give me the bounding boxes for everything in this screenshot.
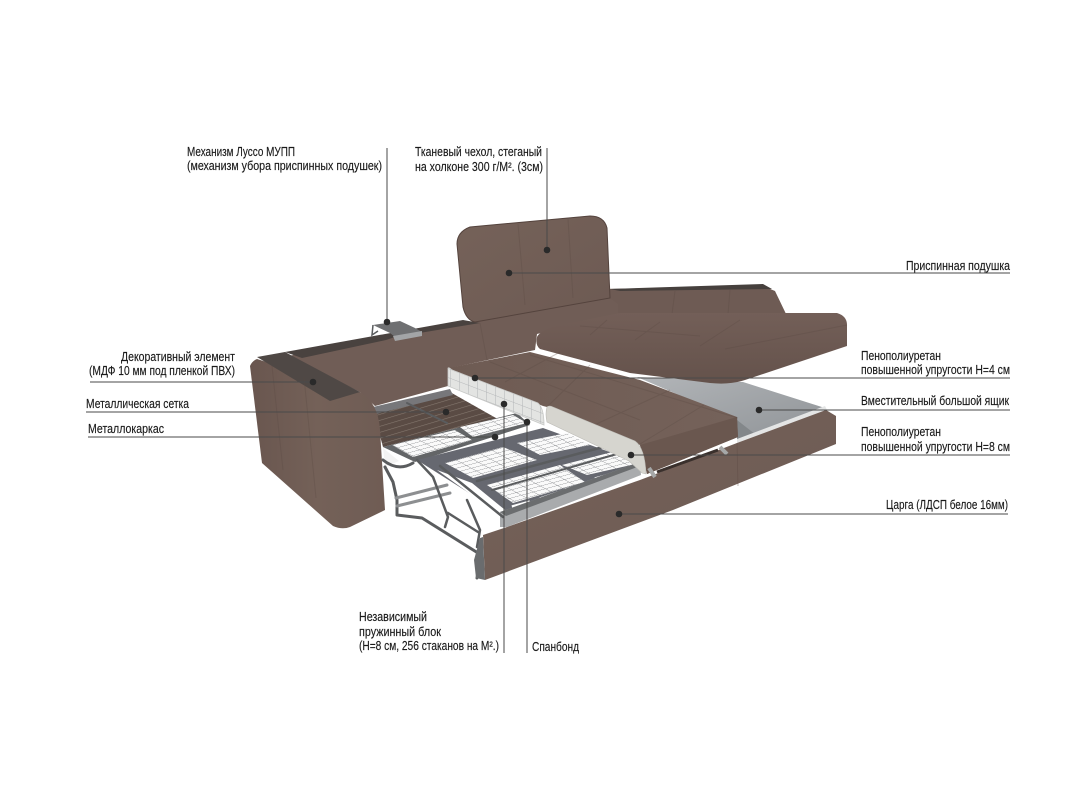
callout: spring block: (Н=8 см, 256 стаканов на М².) — [359, 638, 499, 653]
callout: foam 4 cm: повышенной упругости Н=4 см — [861, 362, 1010, 377]
callout: fabric cover: Тканевый чехол, стеганый — [415, 144, 542, 159]
legs under seat — [649, 447, 727, 477]
callout: foam 4 cm: Пенополиуретан — [861, 348, 941, 363]
callout: metal mesh: Металлическая сетка — [86, 396, 190, 411]
spring block strip, section 1 — [448, 368, 544, 425]
callout: spunbond — [524, 419, 579, 654]
callout: pillow: Приспинная подушка — [906, 258, 1011, 273]
storage box interior — [637, 377, 827, 444]
metal mesh and frame — [383, 413, 641, 527]
callout: foam 8 cm: Пенополиуретан — [861, 424, 941, 439]
callout: foam 8 cm: повышенной упругости Н=8 см — [861, 439, 1010, 454]
callout: mechanism: (механизм убора приспинных подушек) — [187, 158, 382, 173]
slat base behind the mattress — [373, 389, 503, 447]
left arm — [250, 352, 385, 528]
seat mattress, two sections — [448, 352, 738, 477]
raised chaise seat cushion — [536, 313, 847, 384]
rear mesh panels — [392, 430, 472, 457]
callout: decorative element: Декоративный элемент — [121, 349, 235, 364]
callout: metal frame — [88, 421, 498, 440]
callout: tsarga: Царга (ЛДСП белое 16мм) — [886, 497, 1008, 512]
folding mechanism legs — [383, 460, 503, 578]
callout: decorative element — [89, 349, 316, 385]
callout: storage box — [756, 393, 1010, 413]
white slots at the front — [512, 468, 635, 507]
callout: metal frame: Металлокаркас — [88, 421, 164, 436]
arm top: decorative dark panel — [257, 352, 360, 401]
back panel of the sofa — [285, 298, 618, 406]
base front (tsarga) — [483, 410, 836, 580]
callout: pillow — [506, 258, 1011, 276]
front frame base — [417, 428, 640, 517]
side rail — [500, 462, 641, 527]
callout: foam 4 cm — [472, 348, 1010, 381]
callout: spunbond: Спанбонд — [532, 639, 579, 654]
rear frame base — [383, 413, 530, 462]
callout: spring block — [359, 401, 507, 653]
front base wedge — [474, 537, 485, 580]
callout: spring block: пружинный блок — [359, 624, 441, 639]
callout: mechanism — [187, 144, 390, 325]
dark cross bars — [477, 447, 603, 481]
callout: metal mesh — [86, 396, 449, 415]
chaise back with arm — [600, 284, 787, 320]
front mesh panels — [445, 447, 537, 478]
back top strip: dark — [285, 320, 480, 358]
foam strip, section 2 — [546, 406, 646, 474]
edge piece — [383, 448, 399, 467]
callout: fabric cover — [415, 144, 550, 253]
callout: decorative element: (МДФ 10 мм под пленкой ПВХ) — [89, 363, 235, 378]
callout: storage box: Вместительный большой ящик — [861, 393, 1009, 408]
callout: fabric cover: на холконе 300 г/М². (3см) — [415, 159, 543, 174]
callout: foam 8 cm — [628, 424, 1010, 458]
callout: tsarga — [616, 497, 1008, 517]
pillow (headrest) — [457, 216, 610, 322]
mechanism Lusso block — [372, 321, 422, 341]
callout: mechanism: Механизм Луссо МУПП — [187, 144, 295, 159]
callout: spring block: Независимый — [359, 609, 427, 624]
white openings at the front — [437, 470, 510, 514]
